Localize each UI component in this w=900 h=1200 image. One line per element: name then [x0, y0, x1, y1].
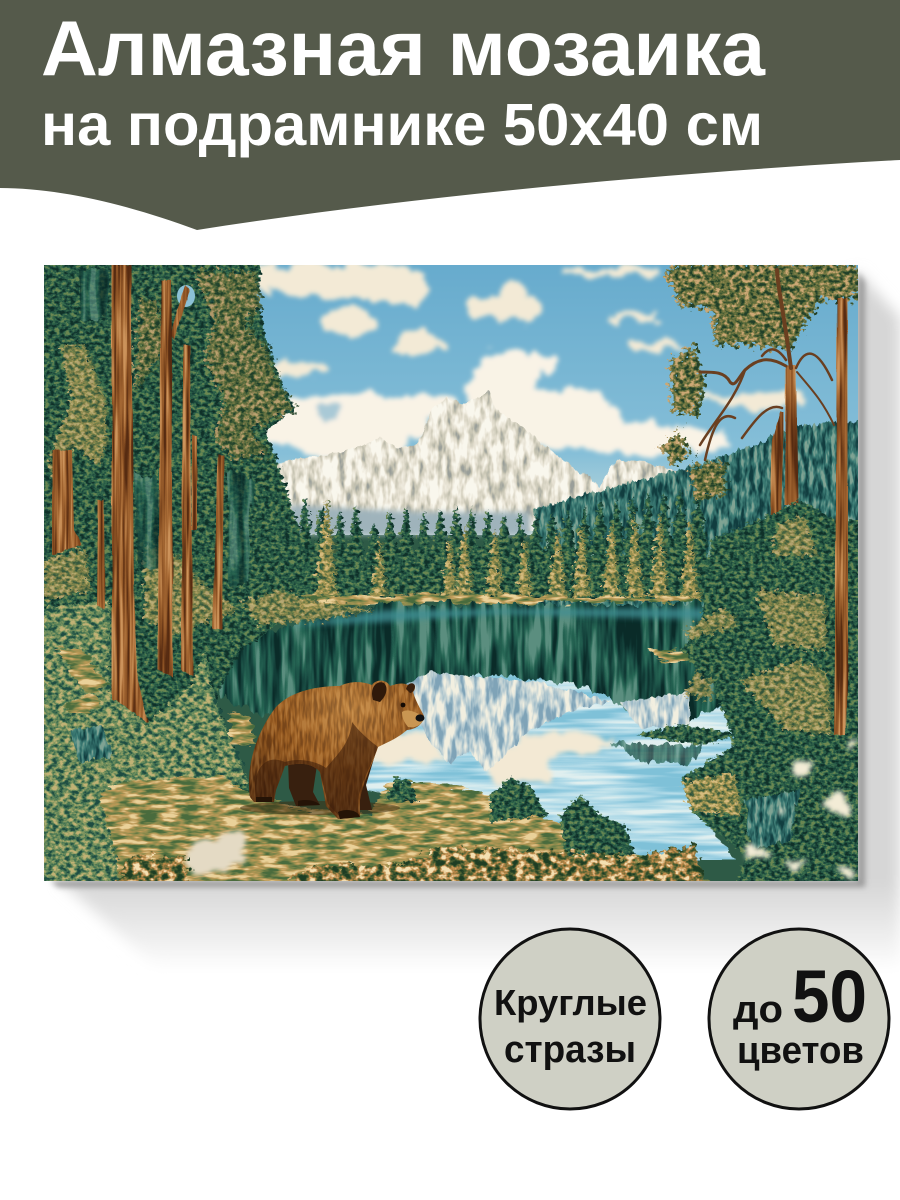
sky — [256, 265, 858, 535]
hillside blue patch — [70, 726, 114, 762]
snowy mountains — [275, 392, 680, 530]
badge: up to 50 colours: до — [733, 989, 783, 1031]
left sunlit fronds — [135, 272, 295, 460]
badge: up to 50 colours: 50 — [792, 955, 867, 1038]
left hillside — [44, 600, 249, 798]
left edge shrubbery — [44, 798, 120, 881]
left tall trunks — [52, 265, 224, 723]
right teal accent foliage — [745, 790, 800, 850]
rock — [187, 835, 243, 875]
yellow conifers — [263, 477, 701, 602]
clouds — [243, 262, 810, 459]
foreground ground — [99, 774, 710, 881]
right pine trunks and branches — [700, 270, 834, 522]
right forest mass — [680, 498, 858, 881]
badge: up to 50 colours: цветов — [737, 1030, 864, 1072]
right bank — [682, 772, 742, 815]
right foreground trunk — [834, 298, 848, 735]
right pine foliage — [660, 262, 860, 500]
bear paws — [256, 797, 360, 819]
distant forested hills — [532, 420, 858, 608]
mountain base haze — [290, 505, 530, 535]
bear body — [249, 681, 424, 819]
badge: round rhinestones: Круглые — [494, 982, 647, 1023]
badge: round rhinestones — [480, 929, 660, 1109]
left yellow-green fronds — [44, 345, 375, 635]
right yellow conifer branches — [684, 515, 832, 735]
lake forest reflection — [205, 604, 745, 725]
heading: title: Алмазная мозаика — [41, 4, 766, 92]
upper lake teal highlight — [285, 608, 715, 626]
left forest canopy — [44, 265, 302, 792]
badge: round rhinestones: стразы — [504, 1029, 636, 1071]
white blossoms — [746, 738, 859, 879]
bear shading — [255, 722, 378, 817]
heading: subtitle: на подрамнике 50х40 см — [41, 92, 763, 158]
lakeside shrubs — [385, 778, 635, 855]
header banner — [0, 0, 900, 230]
bear far legs — [288, 754, 376, 810]
bear fur texture — [249, 681, 424, 819]
forest shoreline conifers — [288, 487, 717, 600]
bear head details — [372, 682, 387, 702]
canvas drop shadow — [50, 272, 900, 966]
badge: up to 50 colours — [709, 929, 889, 1109]
artwork: bear by a mountain lake — [30, 255, 880, 895]
small shore and island — [612, 650, 740, 765]
far shore strip — [300, 594, 700, 610]
left sky gap — [177, 285, 195, 307]
foreground flowers — [114, 842, 705, 881]
cloud reflection — [372, 732, 612, 782]
hillside tan patches — [56, 648, 255, 745]
mountain reflection — [405, 672, 612, 772]
bear — [240, 681, 424, 819]
left dark tree pockets — [75, 270, 255, 590]
lake water — [365, 670, 745, 860]
